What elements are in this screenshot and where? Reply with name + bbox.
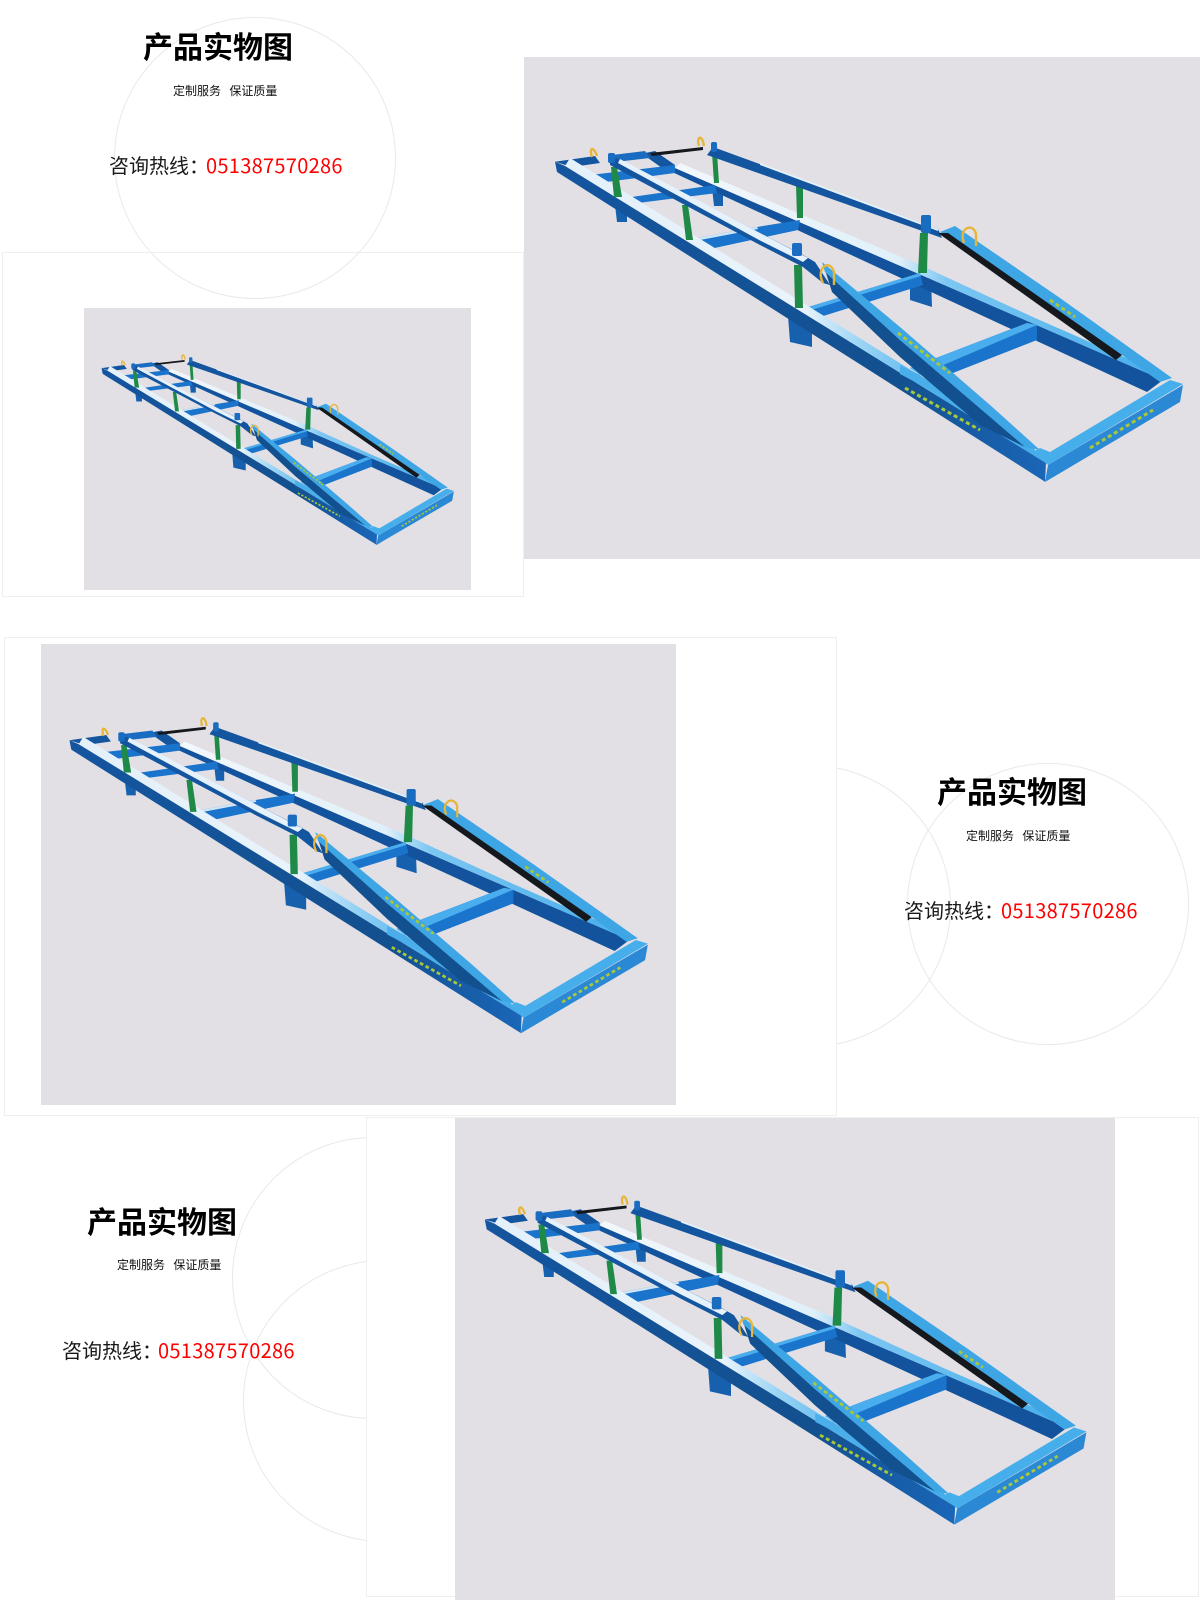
heading: 产品实物图 (937, 768, 1087, 812)
decorative circle: middle block right (907, 763, 1189, 1045)
subtitle: 定制服务 保证质量 (117, 1256, 221, 1273)
panel: middle product card (4, 637, 837, 1116)
decorative circle: middle block left (669, 765, 951, 1047)
hotline label: 咨询热线： (904, 894, 1004, 924)
hotline number: 051387570286 (206, 150, 343, 178)
text block: bottom product heading and hotline (62, 1198, 295, 1364)
product photo: inside bottom card (455, 1118, 1115, 1600)
subtitle: 定制服务 保证质量 (173, 82, 277, 99)
product photo: large, top right (524, 57, 1200, 559)
decorative circle: top block (114, 17, 396, 299)
decorative circle: bottom block upper (232, 1137, 514, 1419)
panel: bottom product card (366, 1117, 1199, 1597)
hotline label: 咨询热线： (109, 150, 209, 178)
text block: middle product heading and hotline (904, 768, 1138, 924)
text block: top product heading and hotline (109, 23, 343, 178)
product photo: small, inside top-left card (84, 308, 471, 590)
panel: top-left product card (2, 252, 524, 597)
hotline number: 051387570286 (1001, 894, 1138, 924)
hotline number: 051387570286 (158, 1335, 295, 1364)
product photo: inside middle card (41, 644, 676, 1105)
subtitle: 定制服务 保证质量 (966, 827, 1070, 844)
heading: 产品实物图 (87, 1198, 237, 1242)
decorative circle: bottom block lower (243, 1260, 525, 1542)
heading: 产品实物图 (143, 23, 293, 67)
hotline label: 咨询热线： (62, 1335, 162, 1364)
